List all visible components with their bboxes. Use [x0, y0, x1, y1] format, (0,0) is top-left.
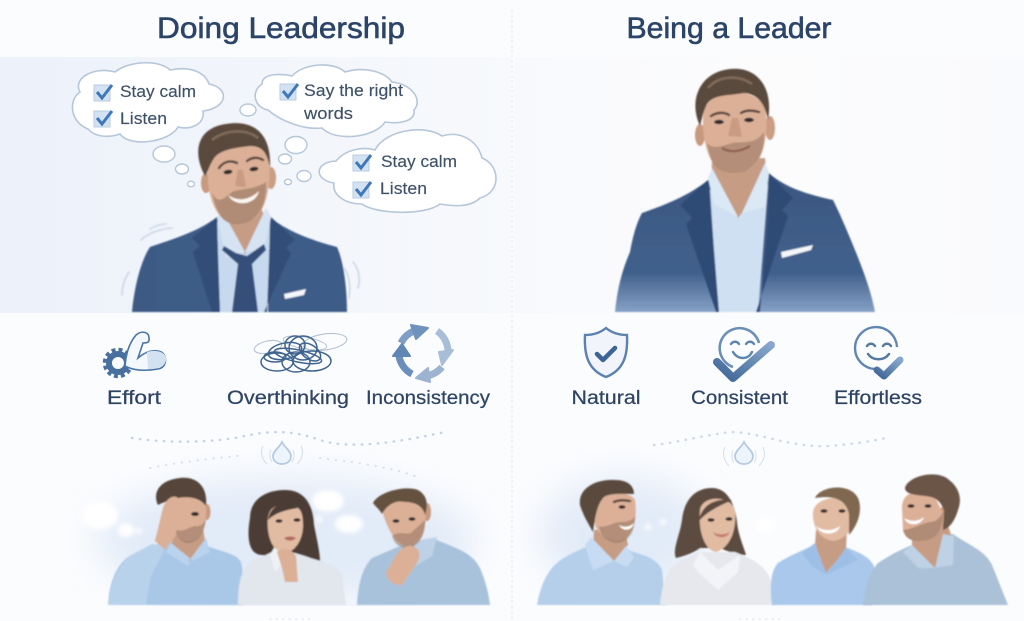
label: Listen	[120, 109, 167, 128]
icon: inconsistency cycle arrows	[393, 325, 453, 382]
glow bubbles left	[82, 490, 363, 537]
face	[208, 140, 270, 223]
nose	[728, 118, 742, 137]
neck	[711, 158, 767, 218]
beard	[212, 182, 266, 224]
panel: being a leader photo background	[514, 57, 1024, 313]
thought bubble trail	[153, 104, 311, 187]
checkbox	[280, 84, 298, 100]
panel: doing leadership photo background	[0, 57, 511, 313]
band below teams	[0, 606, 1024, 621]
shirt	[217, 218, 270, 312]
pocket square	[284, 289, 306, 299]
title: Being a Leader: Being a Leader	[626, 12, 832, 45]
person: smiling man left	[537, 480, 666, 605]
ears	[695, 124, 705, 146]
ripple: right dots and droplet	[654, 432, 885, 466]
lapels	[192, 218, 220, 312]
person: man hand on chin	[357, 488, 490, 605]
label: Inconsistency: Inconsistency	[366, 387, 490, 409]
label: Listen	[380, 179, 427, 198]
suit jacket	[615, 173, 875, 312]
label: Stay calm	[120, 82, 196, 101]
mouth	[722, 146, 750, 151]
bottom faint dots	[270, 618, 780, 620]
person: woman hand on chin	[238, 490, 346, 605]
person: smiling man right	[863, 474, 1008, 605]
illustration: confident man in suit	[615, 69, 875, 312]
eyes	[223, 169, 233, 175]
person: smiling woman center	[660, 488, 777, 605]
illustration: man overthinking in suit	[122, 123, 359, 312]
nose	[235, 170, 246, 187]
hair	[198, 123, 270, 176]
eyes	[714, 120, 724, 124]
icon: overthinking tangle	[253, 331, 348, 372]
checkbox	[353, 155, 371, 171]
panel: worried team background	[95, 478, 475, 602]
collars	[708, 168, 738, 217]
label: words	[303, 104, 353, 123]
icon: smiley with large check	[717, 328, 771, 378]
glow bubbles right	[645, 517, 775, 533]
suit jacket	[132, 217, 347, 312]
label: Consistent: Consistent	[691, 387, 789, 409]
smile	[228, 191, 259, 203]
panel: happy team background	[540, 477, 710, 593]
motion lines	[122, 224, 359, 298]
center divider	[511, 10, 513, 621]
label: Say the right	[304, 81, 403, 100]
label: Effortless: Effortless	[834, 387, 922, 409]
checkbox	[353, 182, 371, 198]
icon: shield with check	[585, 328, 627, 377]
thought cloud: stay calm / listen (right)	[319, 130, 496, 212]
beard	[707, 132, 764, 173]
icon: smiley with small check	[855, 327, 900, 376]
title: Doing Leadership: Doing Leadership	[157, 12, 405, 45]
ears	[201, 173, 211, 193]
label: Natural: Natural	[572, 387, 640, 409]
person: smiling man third	[771, 487, 875, 605]
label: Overthinking: Overthinking	[227, 387, 349, 409]
label: Effort: Effort	[107, 387, 162, 409]
lapels	[680, 180, 719, 312]
pocket square	[781, 245, 813, 258]
shirt	[710, 185, 768, 312]
thought cloud: say the right words	[255, 65, 417, 137]
checkbox	[94, 85, 112, 101]
collars	[217, 210, 245, 258]
thought cloud: stay calm / listen (left)	[72, 63, 223, 142]
tie	[222, 244, 266, 312]
hair	[695, 69, 769, 126]
checkbox	[94, 111, 112, 127]
neck	[220, 205, 266, 254]
icon: effort gear and flexed arm	[104, 332, 166, 376]
person: man hand on forehead	[108, 478, 244, 605]
label: Stay calm	[381, 152, 457, 171]
ripple: left dots and droplet	[132, 432, 445, 478]
face	[703, 92, 766, 173]
